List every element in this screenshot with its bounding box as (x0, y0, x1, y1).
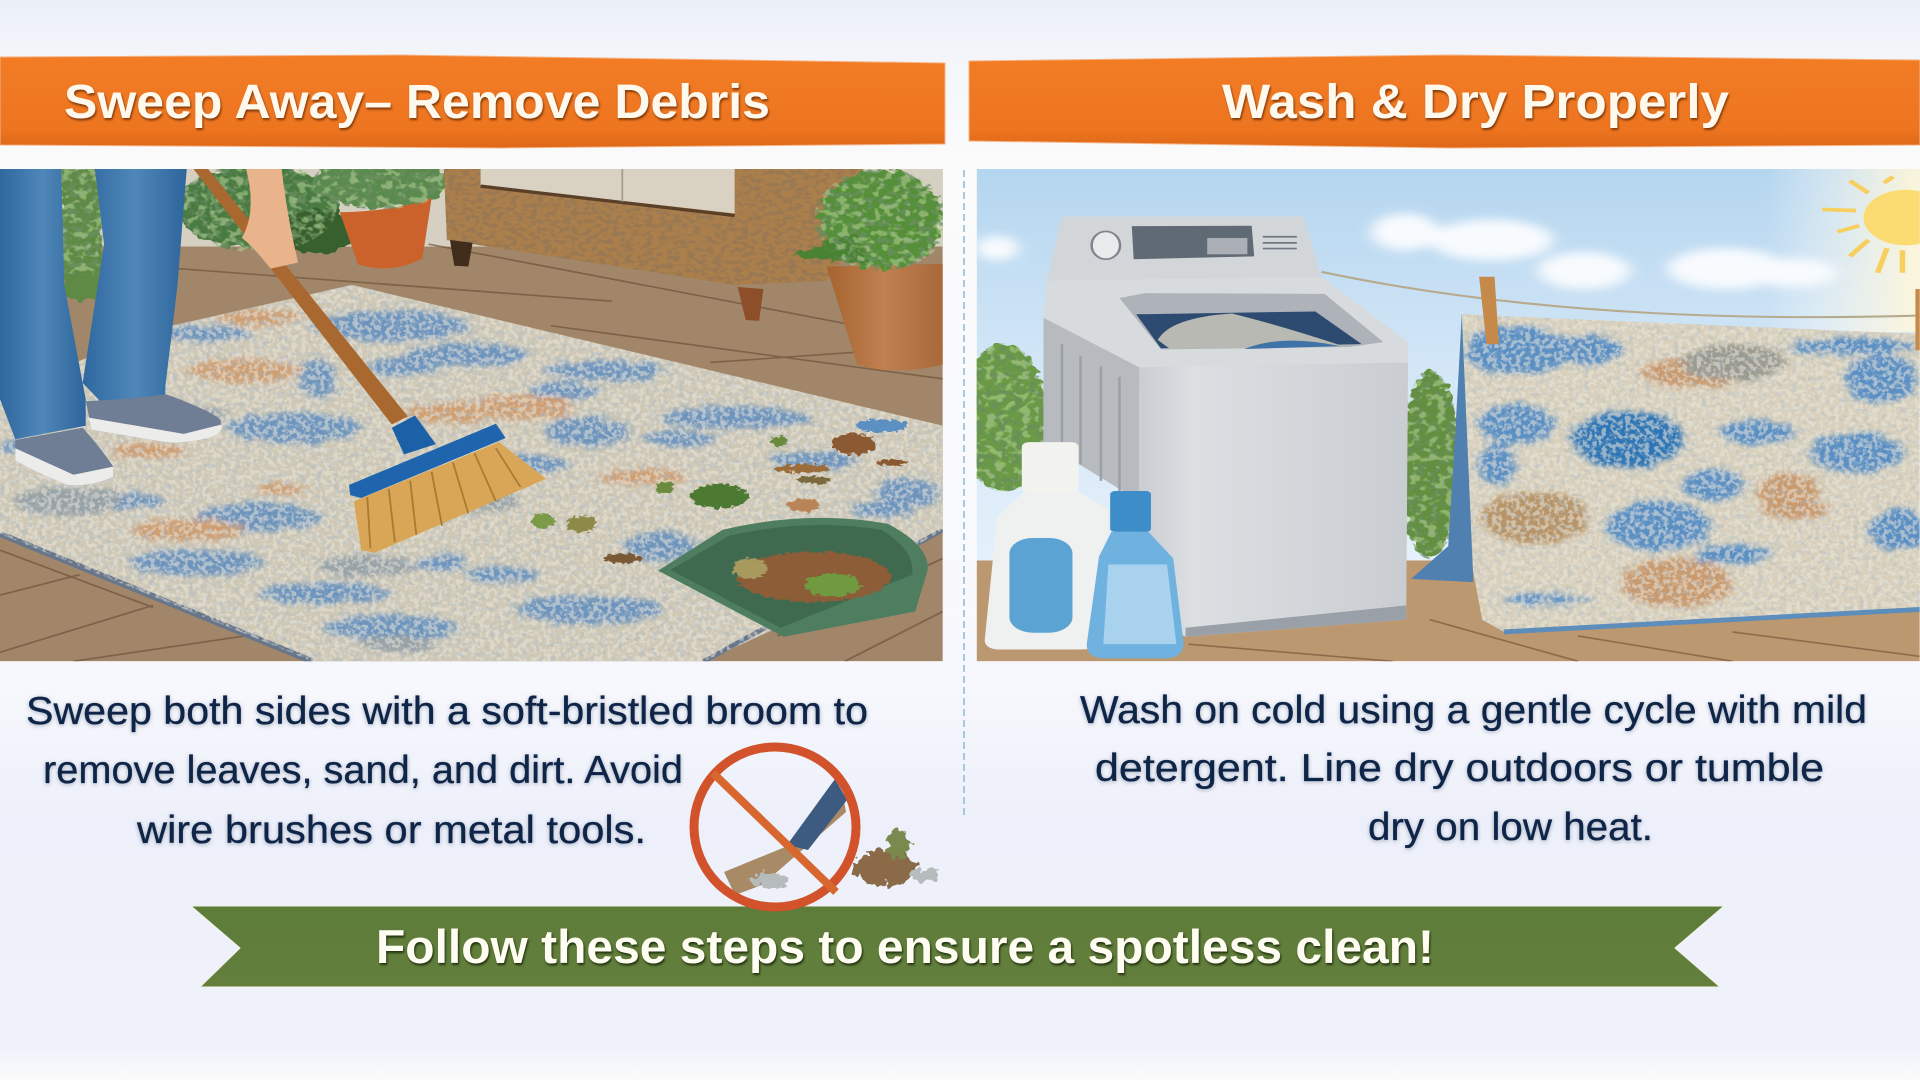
text: wash instructions (1080, 689, 1867, 849)
wicker sofa (444, 169, 863, 285)
text: sweep instructions (26, 690, 868, 852)
brush (724, 795, 846, 895)
text: wash instructions: detergent. Line dry outdoors or tumble (1095, 747, 1824, 790)
header banner: sweep away: Sweep Away– Remove Debris (64, 76, 770, 129)
prohibition ring (694, 747, 856, 907)
dustpan (658, 518, 928, 637)
foliage (61, 158, 447, 300)
header banner: wash and dry: Wash & Dry Properly (1222, 76, 1729, 129)
hand (242, 169, 298, 269)
clothesline (1322, 272, 1920, 317)
bushes (960, 344, 1459, 558)
jeans (0, 169, 86, 439)
large terracotta pot and plant (826, 264, 943, 371)
washing machine (1043, 216, 1408, 637)
debris pile (752, 831, 939, 887)
terracotta pot (340, 198, 432, 268)
broom head (392, 416, 436, 454)
text: sweep instructions: remove leaves, sand, and dirt. Avoid (43, 749, 683, 792)
shoes (86, 394, 221, 443)
header banner: sweep away (0, 55, 945, 148)
text: wash instructions: dry on low heat. (1368, 806, 1653, 849)
text: sweep instructions: Sweep both sides with a soft-bristled broom to (26, 690, 868, 733)
broom bristles (354, 442, 546, 553)
illustration: washer, detergent and line-dried rug (960, 169, 1920, 661)
deck (977, 560, 1920, 661)
blue detergent bottle (1087, 491, 1184, 658)
divider line (963, 170, 965, 819)
sun (1822, 177, 1920, 273)
debris (532, 419, 909, 563)
footer ribbon (191, 906, 1724, 987)
clouds (975, 213, 1838, 289)
illustration: sweeping a rug on a patio (0, 158, 943, 661)
footer ribbon: Follow these steps to ensure a spotless clean! (376, 920, 1434, 973)
clothespins (1479, 277, 1920, 350)
rug (0, 285, 943, 661)
broom handle (193, 169, 408, 425)
hanging rug (1411, 314, 1920, 637)
text: sweep instructions: wire brushes or metal tools. (136, 809, 646, 852)
header banner: wash and dry (969, 55, 1920, 148)
icon: no wire brush (694, 747, 939, 907)
white detergent jug (985, 442, 1108, 649)
text: wash instructions: Wash on cold using a gentle cycle with mild (1080, 689, 1867, 732)
